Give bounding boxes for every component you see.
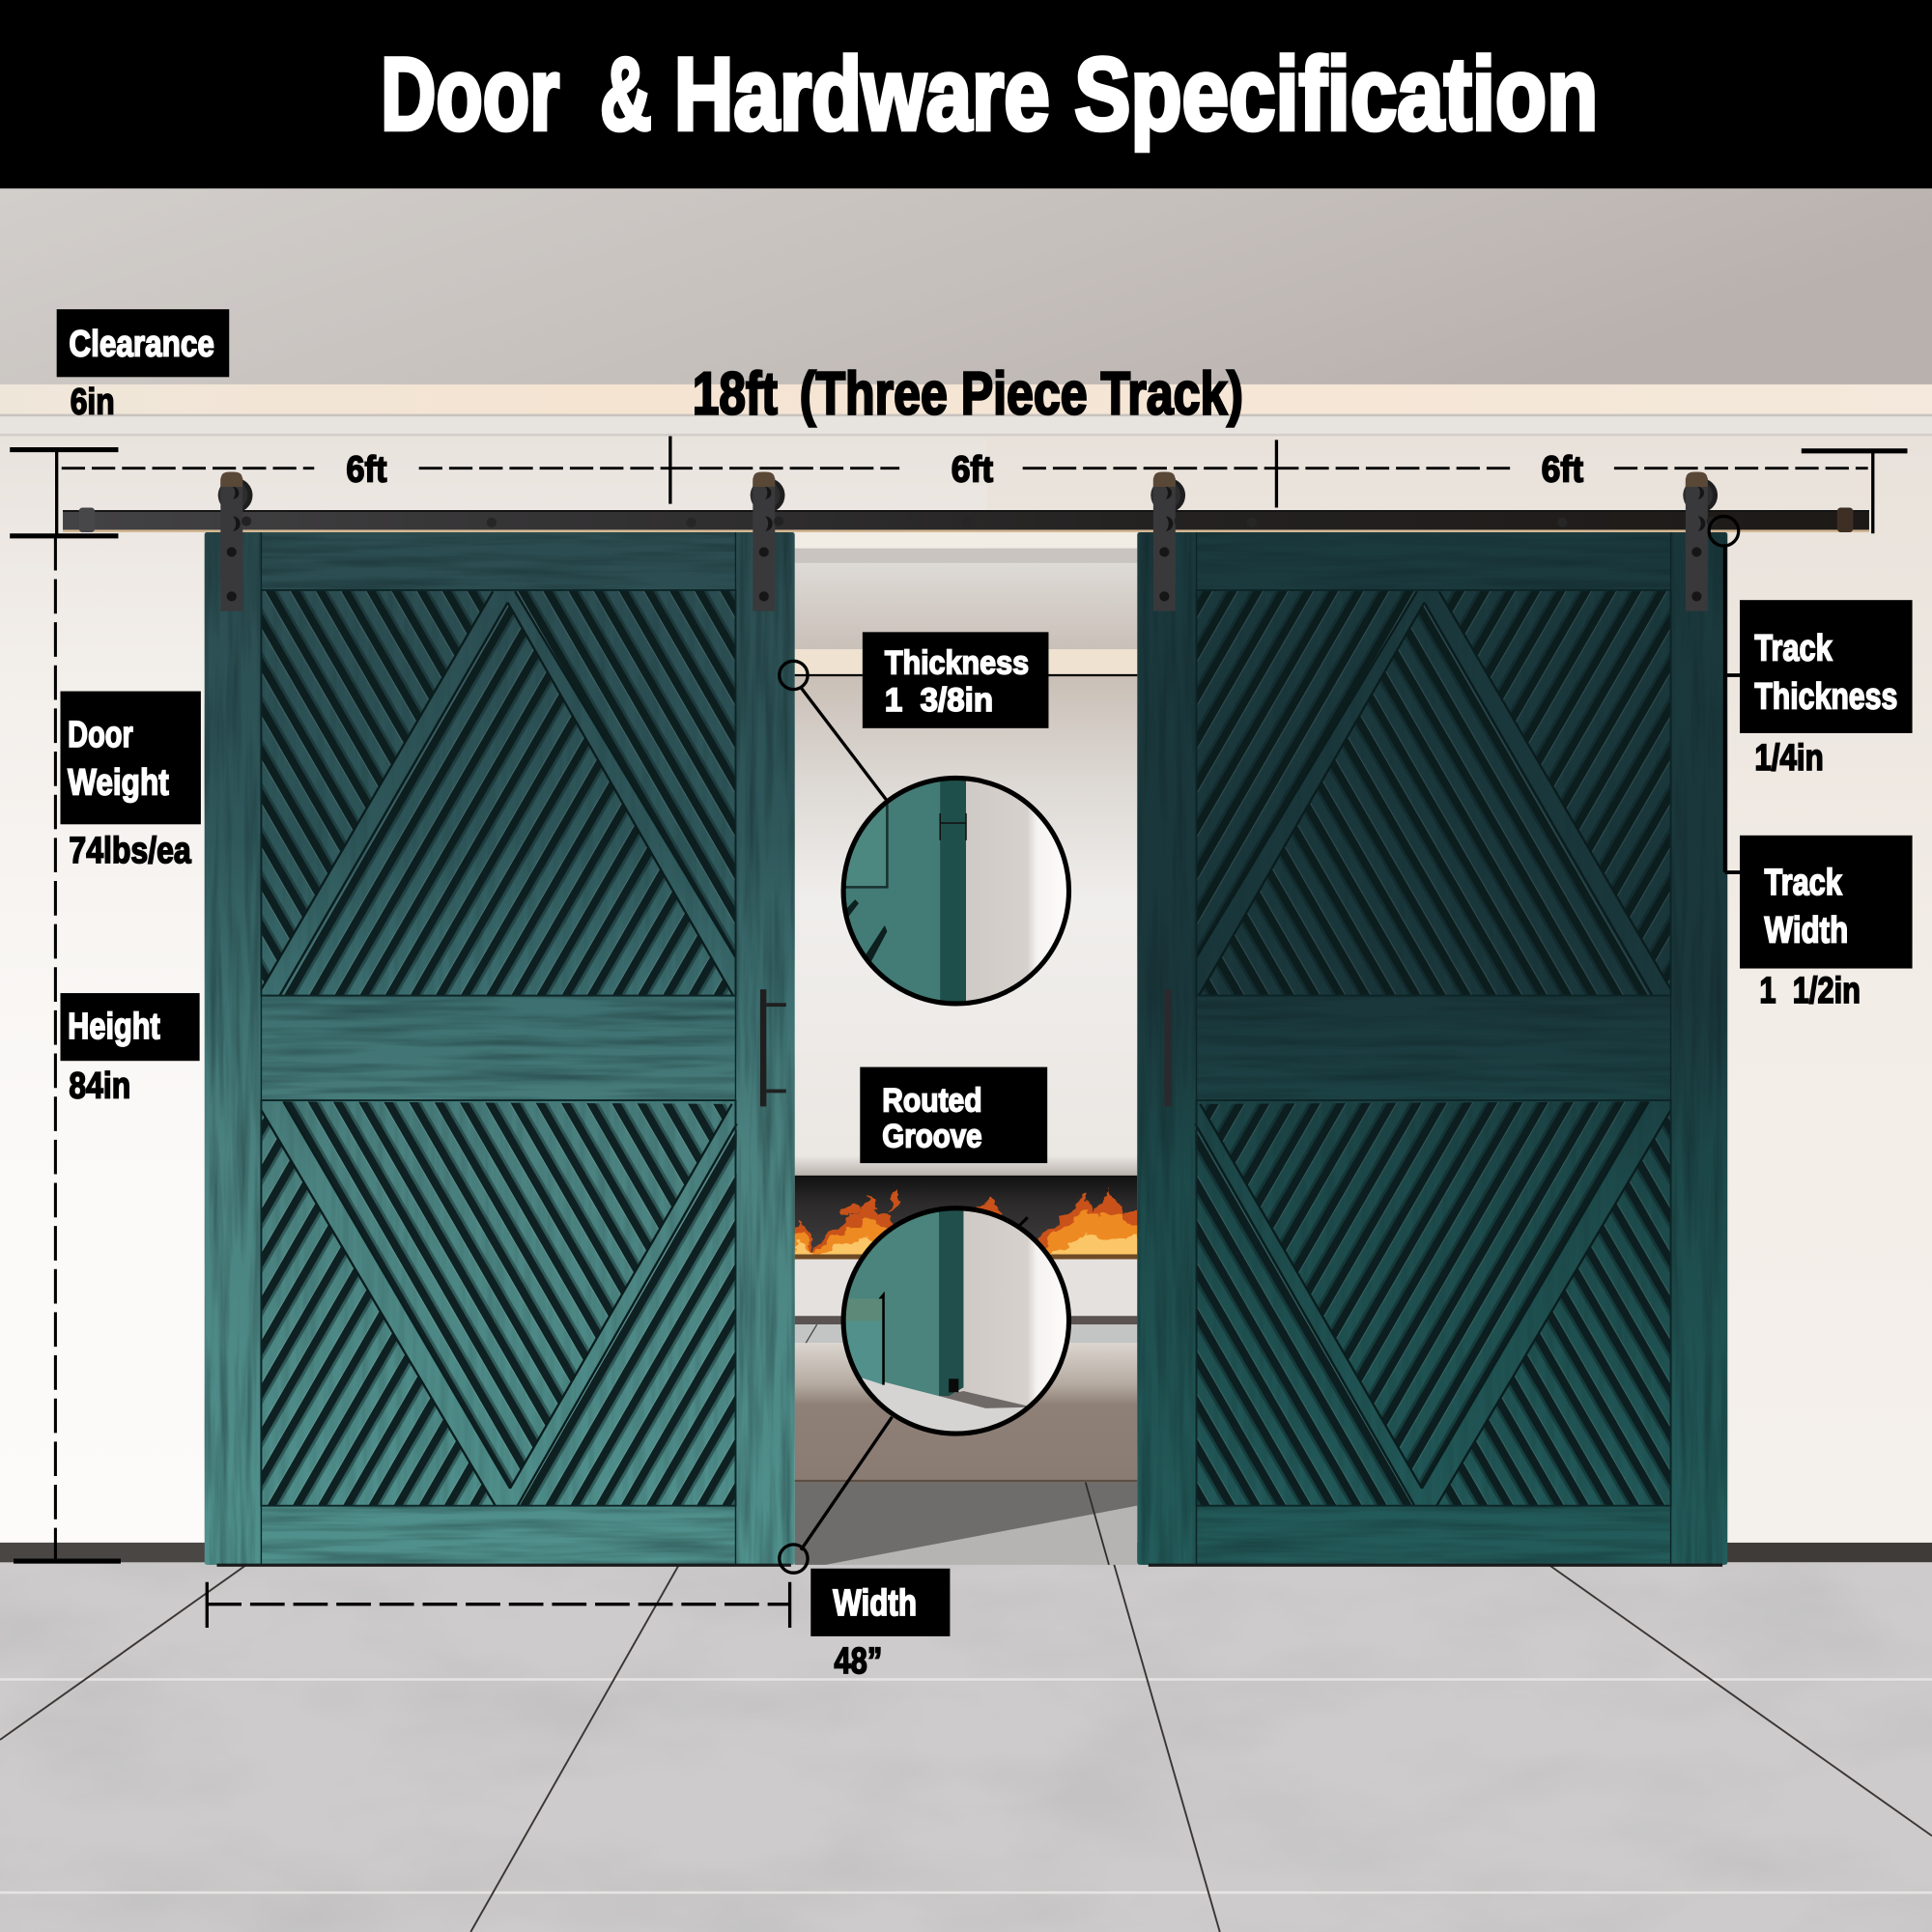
ceiling (0, 188, 1932, 384)
label: door thickness: Thickness (885, 645, 1029, 682)
callout leader lines (780, 516, 1740, 1573)
right barn door (1137, 532, 1727, 1567)
hanger 4 (1683, 472, 1718, 611)
label: track width: Width (1765, 910, 1848, 952)
label: door thickness (863, 632, 1048, 728)
hanger 3 (1151, 472, 1185, 611)
label: height: 84in (69, 1065, 130, 1106)
label: height (60, 993, 200, 1106)
label: track thickness: Thickness (1754, 675, 1897, 717)
label: width: 48” (835, 1640, 882, 1682)
title banner (0, 0, 1932, 188)
label: track width: 1 1/2in (1759, 970, 1861, 1011)
label: clearance (57, 309, 229, 423)
wall left (0, 437, 985, 1543)
label: track thickness: Track (1754, 628, 1833, 669)
floor (0, 1482, 1932, 1932)
dimension: track segments (62, 437, 1907, 533)
label: door weight: Door (68, 714, 133, 755)
segment label 2: 6ft (952, 449, 993, 491)
label: track thickness: 1/4in (1754, 737, 1824, 779)
segment label 1: 6ft (346, 449, 387, 491)
left barn door (205, 532, 795, 1567)
sliding track (63, 508, 1869, 532)
label: track width: Track (1765, 862, 1842, 903)
hanger 1 (218, 472, 252, 611)
label: routed groove: Groove (882, 1118, 982, 1154)
label: track thickness (1740, 600, 1913, 779)
title (381, 36, 1598, 152)
segment label 3: 6ft (1542, 449, 1583, 491)
label: routed groove (860, 1067, 1047, 1163)
label: clearance: Clearance (69, 324, 214, 365)
label: door weight (60, 692, 201, 871)
label: width: Width (833, 1582, 917, 1624)
label: routed groove: Routed (882, 1083, 982, 1120)
magnifier: routed groove detail (838, 1205, 1084, 1441)
track end stops (79, 508, 1853, 532)
label: width (810, 1569, 950, 1682)
heading: track length (693, 360, 1243, 428)
door handle left (760, 989, 786, 1106)
label: track width (1740, 836, 1913, 1011)
track bolts (487, 518, 1567, 527)
label: door weight: 74lbs/ea (69, 830, 191, 871)
cove light strip (0, 384, 1932, 415)
hanger 2 (751, 472, 784, 611)
dimension: clearance bracket and door height (10, 450, 121, 1561)
heading: track length: (Three Piece Track) (800, 360, 1243, 428)
crown moulding (0, 414, 1932, 437)
view through opening (790, 532, 1142, 1565)
label: height: Height (68, 1006, 160, 1047)
title: & (600, 36, 652, 152)
heading: track length: 18ft (693, 360, 778, 428)
fireplace (790, 1176, 1142, 1260)
wall right (985, 437, 1932, 1543)
dimension: door width (207, 1582, 790, 1628)
title: Hardware (674, 36, 1050, 152)
door handle right (1164, 989, 1172, 1106)
baseboard (0, 1543, 1932, 1562)
label: clearance: 6in (71, 382, 115, 423)
magnifier: door thickness detail (838, 777, 1074, 1010)
title: Door (381, 36, 559, 152)
label: door weight: Weight (68, 762, 169, 804)
label: door thickness: 1 3/8in (885, 682, 993, 719)
flames (790, 1186, 1142, 1260)
title: Specification (1074, 36, 1598, 152)
